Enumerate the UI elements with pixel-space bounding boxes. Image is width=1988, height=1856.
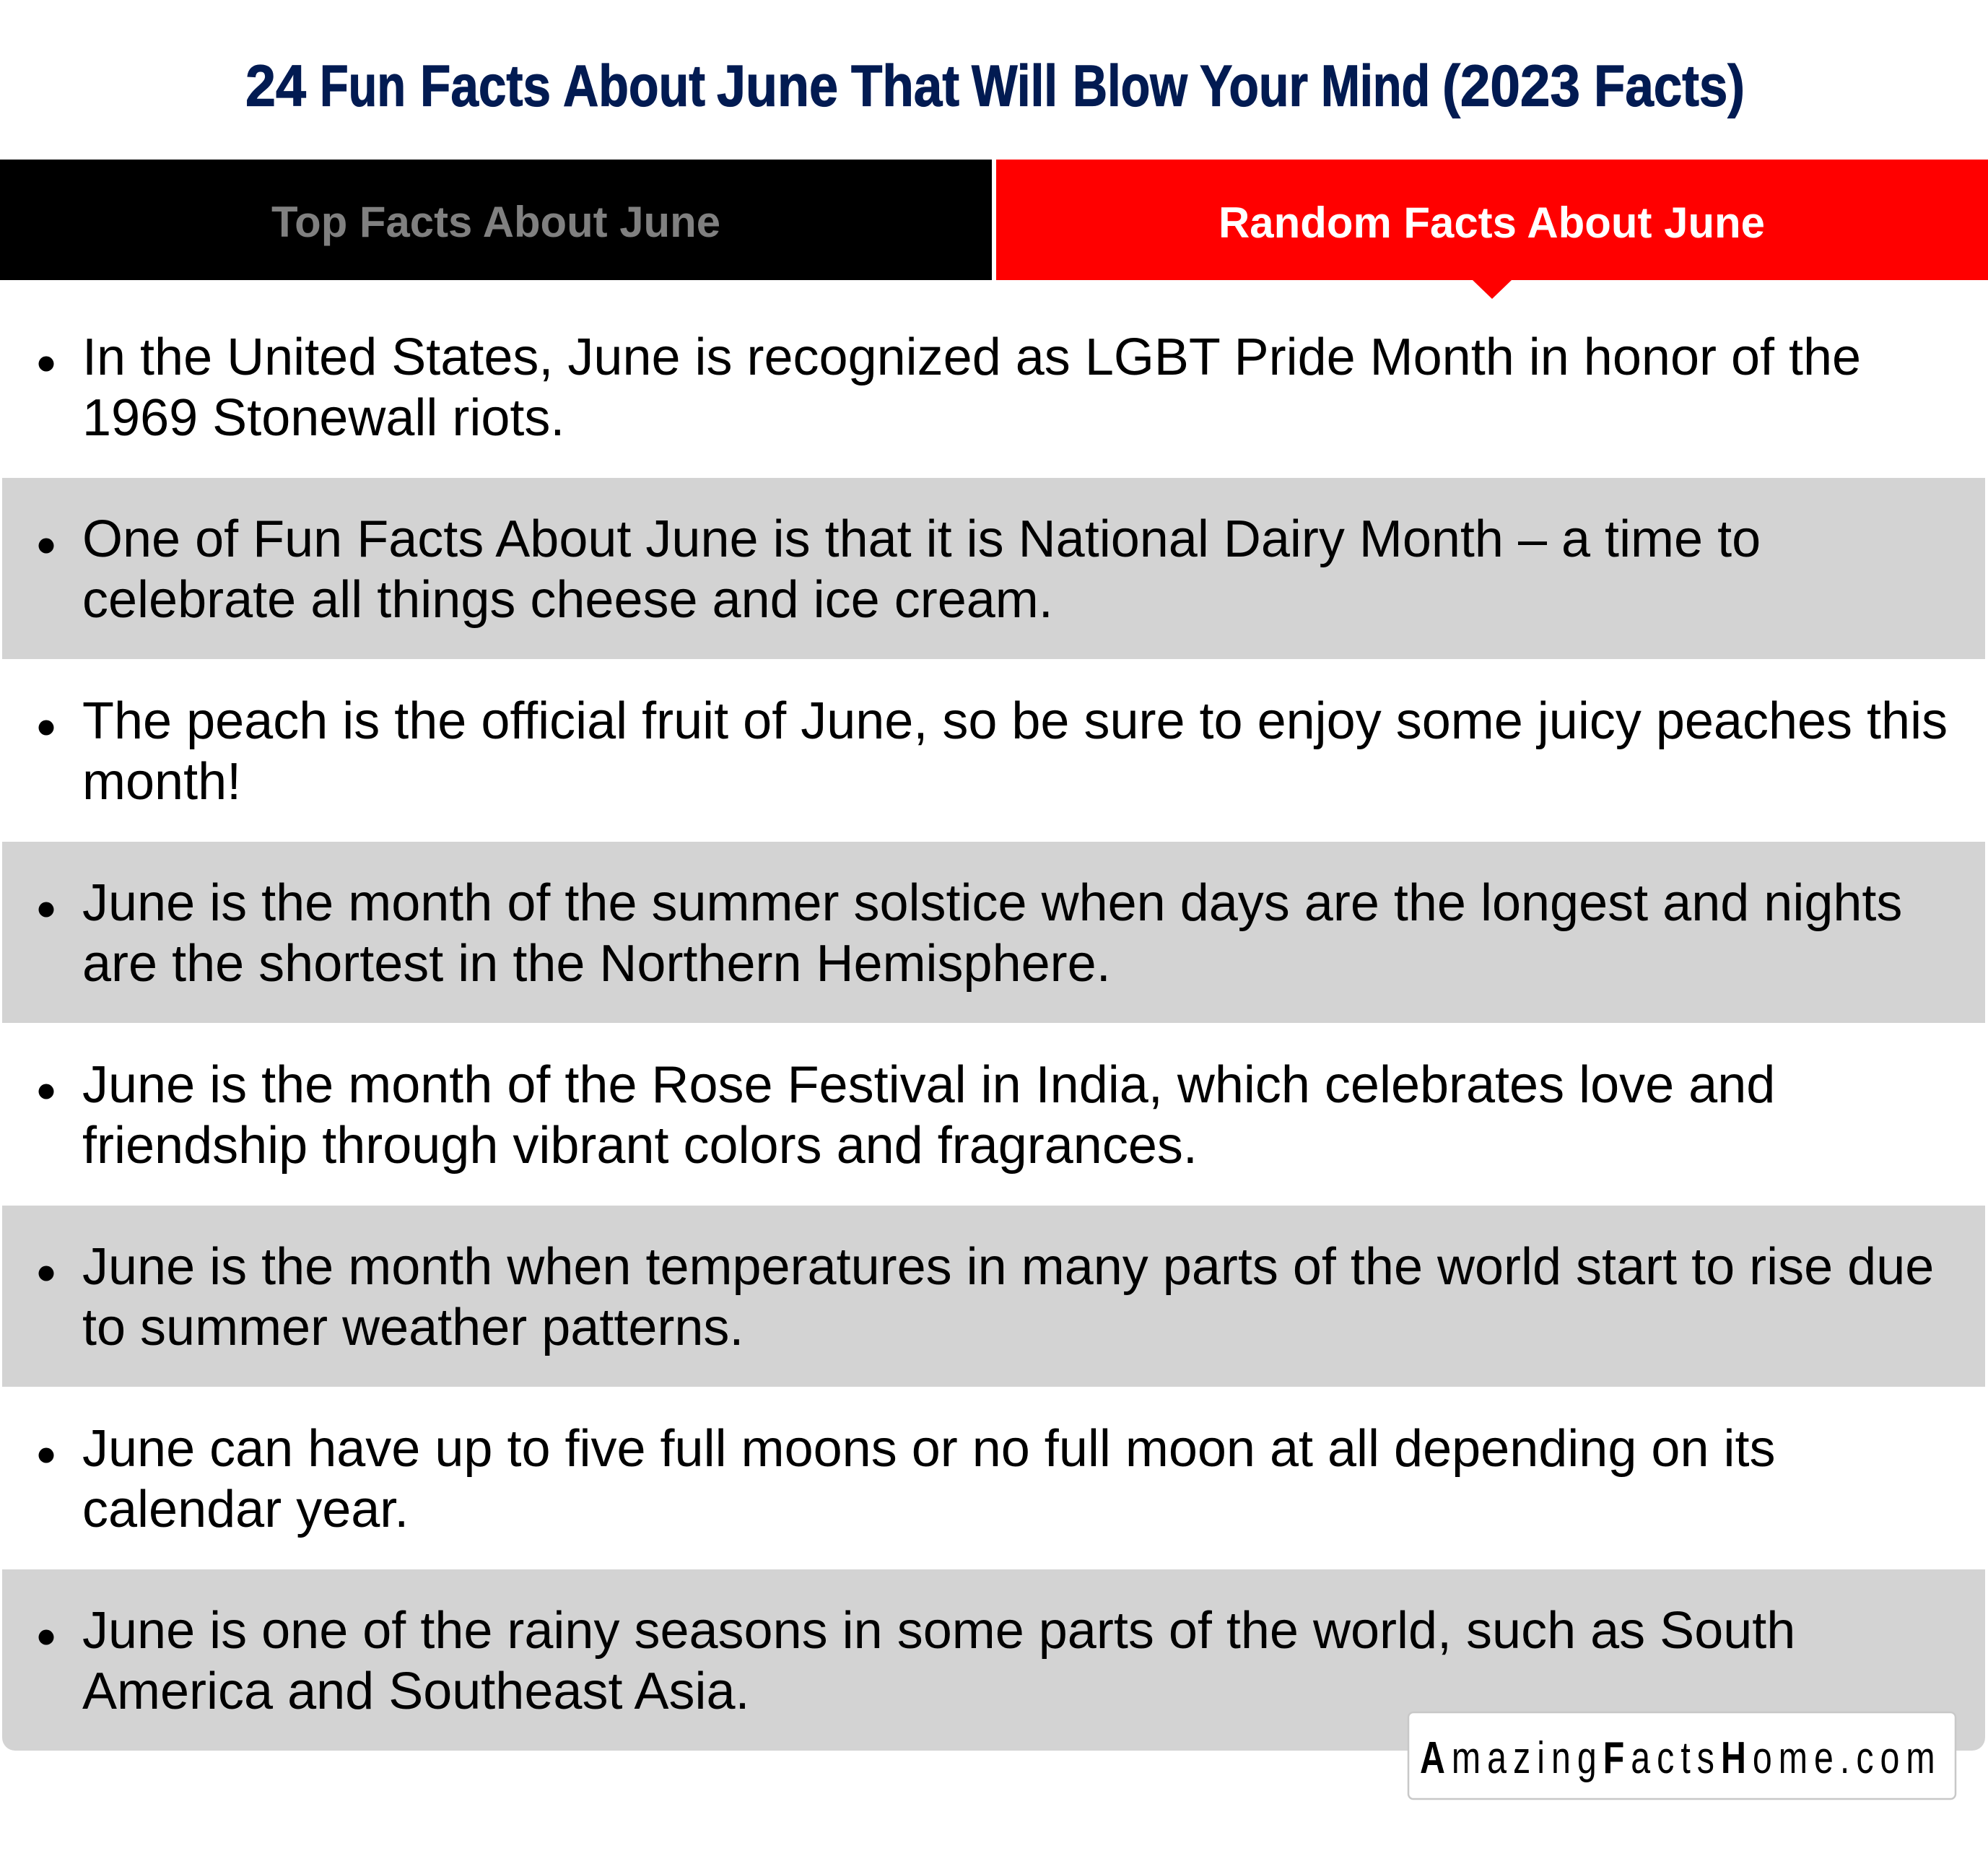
fact 8: America and Southeast Asia. [82,1663,750,1720]
fact 3: month! [82,753,241,811]
title: Fun [320,53,406,118]
title: Facts [420,53,551,118]
fact 4: are the shortest in the Northern Hemisphere. [82,935,1111,993]
fact 5 [39,1056,1775,1175]
fact 1: In the United States, June is recognized as LGBT Pride Month in honor of the [82,328,1861,386]
fact 4: June is the month of the summer solstice when days are the longest and nights [82,874,1902,932]
tab: top facts: Top Facts About June [271,198,720,246]
fact 8: June is one of the rainy seasons in some parts of the world, such as South [82,1602,1795,1660]
fact 5: friendship through vibrant colors and fragrances. [82,1117,1198,1175]
fact 7: calendar year. [82,1481,409,1538]
title: Will [972,53,1058,118]
title: Mind [1321,53,1430,118]
fact 2 [2,478,1985,659]
title: Blow [1073,53,1188,118]
fact 4 [2,842,1985,1023]
fact 7 [39,1420,1775,1538]
watermark: AmazingFactsHome.com [1408,1712,1956,1799]
fact 2: One of Fun Facts About June is that it is National Dairy Month – a time to [82,510,1761,568]
fact 3: The peach is the official fruit of June, so be sure to enjoy some juicy peaches this [82,692,1948,750]
fact 6: June is the month when temperatures in many parts of the world start to rise due [82,1238,1934,1296]
fact 1 [39,328,1861,447]
title: June [717,53,838,118]
fact 1: 1969 Stonewall riots. [82,389,564,447]
fact 6: to summer weather patterns. [82,1299,744,1356]
title: That [851,53,959,118]
title: Your [1200,53,1308,118]
title [245,53,1745,118]
tab: random facts (active) [996,160,1988,299]
title: About [563,53,705,118]
fact 5: June is the month of the Rose Festival in India, which celebrates love and [82,1056,1775,1114]
fact 8 [2,1569,1985,1751]
fact 3 [39,692,1948,811]
watermark: AmazingFactsHome.com: AmazingFactsHome.com [1420,1733,1935,1782]
fact 6 [2,1206,1985,1387]
fact 7: June can have up to five full moons or no full moon at all depending on its [82,1420,1775,1478]
title: (2023 [1442,53,1580,118]
fact 2: celebrate all things cheese and ice cream. [82,571,1053,629]
title: 24 [245,53,306,118]
tab: random facts (active): Random Facts About June [1218,199,1765,247]
tab: top facts [0,160,992,280]
title: Facts) [1594,53,1745,118]
